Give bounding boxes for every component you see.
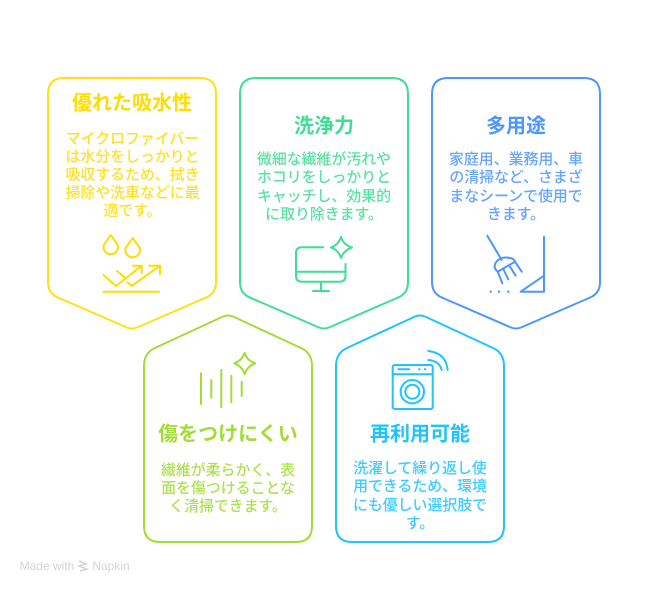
panel: 洗浄力	[240, 78, 408, 328]
icon: dust dots	[490, 290, 509, 293]
text: 吸水性の説明: 掃除や洗車などに最	[65, 184, 200, 202]
watermark: Made with Napkin: Napkin	[92, 559, 130, 573]
text: 多用途の説明: 家庭用、業務用、車	[449, 151, 583, 168]
icon: water drops and check arrows	[104, 235, 160, 292]
icon: monitor with sparkle	[296, 237, 352, 291]
text: 吸水性の説明	[65, 130, 200, 220]
text: 傷をつけにくいの説明: 面を傷つけることな	[161, 479, 295, 497]
text: 再利用可能の説明	[353, 460, 487, 532]
icon: broom and dustpan	[487, 236, 544, 292]
text: 吸水性の説明: マイクロファイバー	[66, 130, 199, 148]
text: 洗浄力の説明: キャッチし、効果的	[257, 188, 391, 205]
text: 再利用可能の説明: 用できるため、環境	[353, 478, 487, 495]
icon: washing machine with waves	[393, 351, 448, 409]
text: 洗浄力の説明	[257, 150, 391, 223]
panel: 再利用可能	[336, 316, 504, 542]
heading: 再利用可能: 再利用可能	[370, 422, 470, 446]
text: 吸水性の説明: 適です。	[103, 202, 162, 220]
text: 傷をつけにくいの説明: 繊維が柔らかく、表	[161, 461, 295, 479]
watermark: Made with Napkin: Made with	[20, 559, 74, 573]
panel: 多用途	[432, 78, 600, 328]
text: 多用途の説明: の清掃など、さまざ	[449, 168, 583, 186]
text: 再利用可能の説明: にも優しい選択肢で	[353, 497, 487, 514]
icon: scratch lines with sparkle	[201, 353, 255, 407]
text: 再利用可能の説明: す。	[406, 515, 434, 532]
text: 傷をつけにくいの説明: く清掃できます。	[169, 498, 287, 515]
text: 多用途の説明	[449, 151, 583, 223]
text: 多用途の説明: まなシーンで使用で	[449, 188, 583, 205]
text: 洗浄力の説明: に取り除きます。	[265, 206, 383, 223]
heading: 洗浄力: 洗浄力	[294, 114, 354, 138]
text: 洗浄力の説明: ホコリをしっかりと	[257, 169, 391, 186]
text: 傷をつけにくいの説明	[161, 461, 295, 515]
panel: 傷をつけにくい	[144, 316, 312, 542]
watermark: Made with Napkin	[20, 559, 130, 573]
heading: 優れた吸水性: 優れた吸水性	[72, 92, 192, 114]
icon: washer indicator dots	[418, 368, 426, 370]
text: 再利用可能の説明: 洗濯して繰り返し使	[353, 460, 487, 477]
text: 吸水性の説明: は水分をしっかりと	[65, 148, 200, 166]
heading: 傷をつけにくい: 傷をつけにくい	[158, 422, 298, 446]
text: 多用途の説明: きます。	[487, 206, 545, 223]
icon: Napkin logo	[79, 561, 87, 571]
heading: 多用途: 多用途	[486, 114, 546, 138]
panel: 優れた吸水性	[48, 78, 216, 328]
text: 吸水性の説明: 吸収するため、拭き	[65, 166, 200, 184]
text: 洗浄力の説明: 微細な繊維が汚れや	[257, 150, 391, 168]
